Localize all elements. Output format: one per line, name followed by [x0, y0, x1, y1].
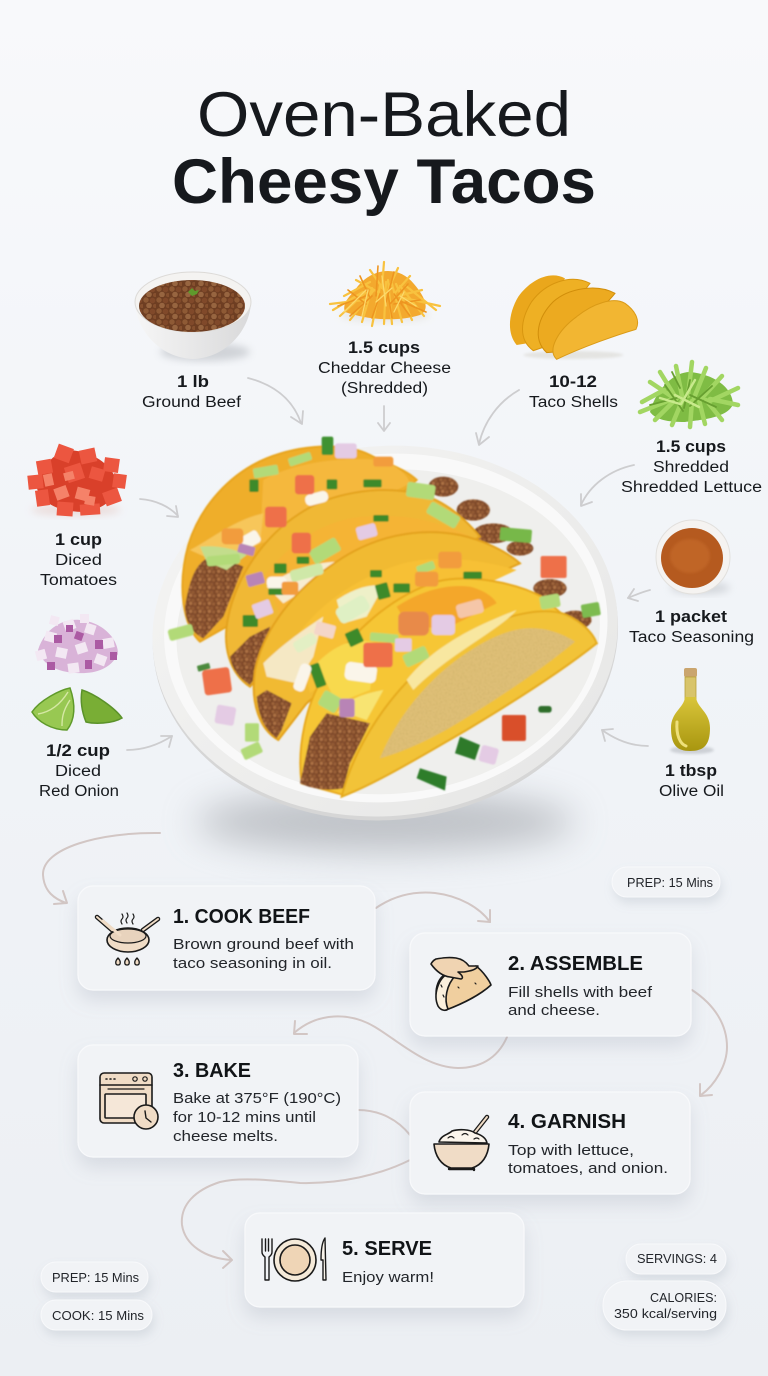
- ingredient label: shredded lettuce: Shredded Lettuce: [621, 479, 762, 496]
- pill: prep time top right: [612, 867, 720, 897]
- icon: hand holding taco: [431, 958, 491, 1010]
- tacos on plate: [167, 437, 601, 797]
- icon: bowl with spoon: [434, 1117, 489, 1170]
- step card 3: bake: for 10-12 mins until: [173, 1109, 316, 1126]
- pill: calories: 350 kcal/serving: [614, 1307, 717, 1321]
- ingredient: taco shells: [510, 275, 638, 359]
- white crema and onion toppings: [214, 443, 499, 765]
- icon: plate with cutlery: [262, 1238, 326, 1281]
- ingredient label: olive oil: [659, 762, 724, 800]
- pill: servings: [626, 1244, 726, 1274]
- arrow: oil to plate: [602, 729, 648, 746]
- ingredient label: shredded lettuce: [621, 438, 762, 496]
- step arrow: step 2 to 4: [692, 990, 727, 1096]
- ingredient label: diced tomatoes: Tomatoes: [40, 572, 117, 589]
- ingredient: taco seasoning bowl: [656, 520, 730, 594]
- title: Oven-Baked: [197, 80, 571, 150]
- step card 1: cook beef: Brown ground beef with: [173, 936, 354, 953]
- arrow: beef to plate: [248, 378, 303, 424]
- ingredient: diced tomatoes: [27, 444, 127, 517]
- ingredient: shredded cheddar: [330, 262, 440, 326]
- pill: prep time top right: PREP: 15 Mins: [627, 876, 713, 890]
- ingredient label: ground beef: Ground Beef: [142, 394, 242, 411]
- step arrow: step 2 to 3: [294, 1016, 507, 1068]
- ingredient label: red onion: Diced: [55, 763, 101, 780]
- ingredient: shredded lettuce: [640, 362, 738, 427]
- ingredient label: olive oil: 1 tbsp: [665, 762, 717, 780]
- ingredient label: taco shells: 10-12: [549, 373, 597, 391]
- ingredient label: diced tomatoes: [40, 531, 117, 589]
- step card 4: garnish: Top with lettuce,: [508, 1142, 634, 1159]
- step card 2: assemble: and cheese.: [508, 1002, 600, 1019]
- step card 1: cook beef: [78, 886, 375, 990]
- icon: oven with timer: [100, 1073, 158, 1129]
- ingredient label: red onion: [39, 742, 119, 800]
- step arrow: step 4 to 5: [182, 1160, 410, 1268]
- arrow: seasoning to plate: [628, 589, 650, 601]
- step card 5: serve: [245, 1213, 524, 1307]
- taco 4 front shell: [342, 610, 597, 797]
- ingredient label: olive oil: Olive Oil: [659, 783, 724, 800]
- step card 4: garnish: 4. GARNISH: [508, 1110, 626, 1133]
- title: Cheesy Tacos: [172, 147, 596, 217]
- ingredient label: taco seasoning: [629, 608, 754, 646]
- ingredient label: cheddar cheese: [318, 339, 451, 397]
- plate: [137, 426, 634, 840]
- ingredient label: shredded lettuce: Shredded: [653, 459, 729, 476]
- green herb toppings: [197, 437, 552, 791]
- step card 4: garnish: [410, 1092, 690, 1194]
- step card 3: bake: 3. BAKE: [173, 1059, 251, 1082]
- step card 3: bake: [78, 1045, 358, 1157]
- step card 2: assemble: 2. ASSEMBLE: [508, 952, 643, 975]
- beef spilling behind tacos: [428, 477, 592, 629]
- ingredient: ground beef bowl: [135, 272, 251, 361]
- ingredient label: red onion: 1/2 cup: [46, 742, 110, 760]
- step arrow: step 3 to 4 curve: [358, 1110, 410, 1135]
- step card 2: assemble: [410, 933, 691, 1036]
- taco 1: [182, 447, 417, 642]
- ingredient label: taco seasoning: 1 packet: [655, 608, 728, 626]
- ingredient label: ground beef: [142, 373, 242, 411]
- ingredient label: taco shells: Taco Shells: [529, 394, 618, 411]
- ingredient label: cheddar cheese: (Shredded): [341, 380, 428, 397]
- pill: cook time: [41, 1300, 152, 1330]
- ingredient label: shredded lettuce: 1.5 cups: [656, 438, 726, 456]
- step card 5: serve: Enjoy warm!: [342, 1269, 434, 1286]
- lettuce toppings: [167, 452, 601, 760]
- arrow: onion to plate: [127, 736, 172, 750]
- plate shadow: [195, 792, 575, 852]
- arrow: tomatoes to plate: [140, 499, 178, 517]
- ingredient: diced red onion and lime: [32, 614, 122, 730]
- ingredient label: diced tomatoes: 1 cup: [55, 531, 102, 549]
- icon: pan on burner: [97, 913, 158, 965]
- step card 3: bake: cheese melts.: [173, 1128, 278, 1145]
- step card 3: bake: Bake at 375°F (190°C): [173, 1090, 341, 1107]
- pill: prep time: PREP: 15 Mins: [52, 1271, 139, 1285]
- step card 5: serve: 5. SERVE: [342, 1237, 432, 1260]
- step card 2: assemble: Fill shells with beef: [508, 984, 653, 1001]
- pill: servings: SERVINGS: 4: [637, 1252, 717, 1266]
- pill: cook time: COOK: 15 Mins: [52, 1309, 144, 1323]
- ingredient label: diced tomatoes: Diced: [55, 552, 102, 569]
- ingredient label: red onion: Red Onion: [39, 783, 119, 800]
- arrow: shells to plate: [476, 390, 519, 445]
- arrow: lettuce to plate: [581, 465, 634, 506]
- pill: prep time: [41, 1262, 148, 1292]
- step card 1: cook beef: taco seasoning in oil.: [173, 955, 332, 972]
- taco 3: [254, 532, 520, 740]
- step arrow: step 1 to 2: [376, 893, 490, 922]
- ingredient label: taco seasoning: Taco Seasoning: [629, 629, 754, 646]
- ingredient label: ground beef: 1 lb: [177, 373, 209, 391]
- title: [172, 80, 596, 217]
- pill: calories: [603, 1281, 726, 1330]
- tomato toppings: [202, 457, 567, 741]
- arrow: cheese to plate: [378, 406, 390, 431]
- pill: calories: CALORIES:: [650, 1291, 717, 1305]
- ingredient: olive oil bottle: [670, 668, 714, 754]
- step card 4: garnish: tomatoes, and onion.: [508, 1160, 668, 1177]
- ingredient label: cheddar cheese: Cheddar Cheese: [318, 360, 451, 377]
- taco 4 interior: [300, 579, 597, 795]
- taco 2: [226, 490, 480, 687]
- ingredient label: taco shells: [529, 373, 618, 411]
- ingredient label: cheddar cheese: 1.5 cups: [348, 339, 420, 357]
- step card 1: cook beef: 1. COOK BEEF: [173, 905, 310, 928]
- icon: lime wedges: [32, 688, 122, 730]
- step arrow: to step 1: [43, 833, 160, 904]
